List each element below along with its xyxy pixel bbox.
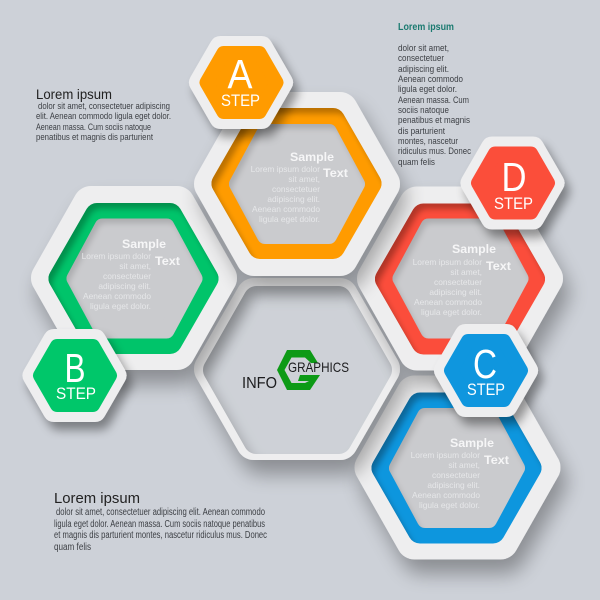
text block: bottom left: dolor sit amet, consectetuer adipiscing elit. Aenean commodo [56,507,265,518]
panel: step C hexagon: Sample [450,436,494,450]
panel: step D hexagon: consectetuer [434,277,482,287]
panel: step A hexagon: Aenean commodo [252,204,320,214]
text block: bottom left: Lorem ipsum [54,490,140,507]
badge: D STEP: STEP [494,194,533,213]
text block: top right: sociis natoque [398,105,449,115]
badge: B STEP: B [64,345,86,391]
panel: step A hexagon [212,110,382,258]
text block: top left: Aenean massa. Cum sociis natoque [36,122,151,132]
text block: bottom left [54,490,267,553]
text: GRAPHICS: GRAPHICS [288,359,349,375]
badge: C STEP: C [473,341,497,387]
panel: step B hexagon: adipiscing elit. [98,281,151,291]
panel: step C hexagon: Lorem ipsum dolor [411,450,480,460]
badge: D STEP [472,148,554,218]
panel: step B hexagon: consectetuer [103,271,151,281]
badge: A STEP: A [228,51,253,97]
panel: step D hexagon: Lorem ipsum dolor [413,257,482,267]
panel: step B hexagon [49,204,219,352]
panel: step C hexagon: Text [484,453,509,467]
text block: bottom left: ligula eget dolor. Aenean massa. Cum sociis natoque penatibus [54,519,265,530]
panel: step D hexagon: ligula eget dolor. [421,307,482,317]
badge: B STEP: STEP [56,384,96,403]
text block: top right: dolor sit amet, [398,43,449,53]
panel: step C hexagon: Aenean commodo [412,490,480,500]
badge: A STEP: STEP [221,91,260,110]
panel: step D hexagon [375,204,545,352]
panel: step B hexagon: Lorem ipsum dolor [82,251,151,261]
panel: step D hexagon: Sample [452,242,496,256]
panel: step B hexagon: sit amet, [119,261,151,271]
panel: step D hexagon: Aenean commodo [414,297,482,307]
panel: step C hexagon: consectetuer [432,470,480,480]
panel: step A hexagon: Text [323,166,348,180]
panel: step D hexagon: adipiscing elit. [429,287,482,297]
text block: top right: Aenean commodo [398,74,463,84]
panel: step B hexagon: ligula eget dolor. [90,301,151,311]
text block: top right: ligula eget dolor. [398,84,457,94]
icon: G logo [277,350,320,390]
text block: top right: Lorem ipsum [398,21,454,33]
panel: step A hexagon: sit amet, [288,174,320,184]
text block: top left [36,86,171,142]
text block: top right: quam felis [398,157,435,167]
text block: top right: consectetuer [398,53,444,63]
panel: step C hexagon: ligula eget dolor. [419,500,480,510]
text block: top right: penatibus et magnis [398,115,470,125]
text block: top left: Lorem ipsum [36,86,112,102]
panel: step A hexagon: consectetuer [272,184,320,194]
panel: step A hexagon: adipiscing elit. [267,194,320,204]
text block: top left: dolor sit amet, consectetuer adipiscing [38,101,170,111]
badge: C STEP: STEP [467,380,505,399]
panel: step B hexagon: Text [155,254,180,268]
panel: step C hexagon: sit amet, [448,460,480,470]
panel: step A hexagon: Lorem ipsum dolor [251,164,320,174]
badge: B STEP [34,340,116,411]
text block: top right: montes, nascetur [398,136,458,146]
panel: center hexagon [212,296,382,442]
panel: step C hexagon: adipiscing elit. [427,480,480,490]
panel: step A hexagon: ligula eget dolor. [259,214,320,224]
badge: D STEP: D [502,154,526,200]
text block: top left: elit. Aenean commodo ligula eget dolor. [36,111,171,121]
badge: A STEP [200,47,282,118]
panel: step B hexagon: Sample [122,237,166,251]
badge: C STEP [445,335,527,406]
panel: step D hexagon: sit amet, [450,267,482,277]
panel: step C hexagon [372,394,542,542]
panel: step B hexagon: Aenean commodo [83,291,151,301]
text block: bottom left: et magnis dis parturient montes, nascetur ridiculus mus. Donec [54,530,267,541]
text: INFO: INFO [242,375,277,392]
text block: top right [398,21,471,167]
text block: top right: ridiculus mus. Donec [398,146,471,156]
text block: bottom left: quam felis [54,542,91,553]
panel: step A hexagon: Sample [290,150,334,164]
text block: top right: adipiscing elit. [398,64,449,74]
text block: top left: penatibus et magnis dis parturient [36,132,153,142]
text block: top right: dis parturient [398,126,445,136]
text block: top right: Aenean massa. Cum [398,95,469,105]
panel: step D hexagon: Text [486,259,511,273]
